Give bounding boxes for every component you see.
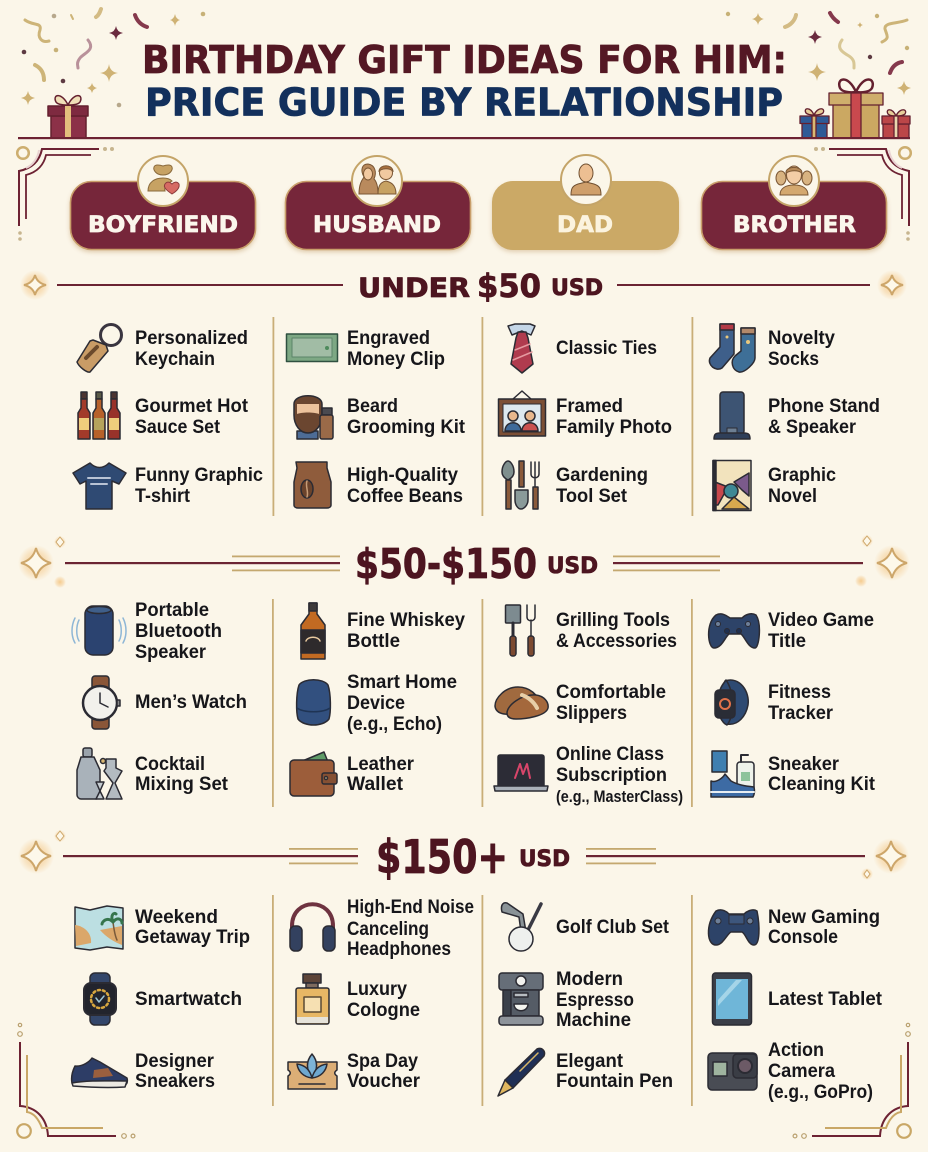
section heading: under $50: UNDER	[358, 273, 470, 304]
icon: hot sauce bottles	[78, 392, 120, 439]
item: comfortable slippers	[495, 681, 666, 724]
item: gourmet hot sauce set	[78, 392, 248, 439]
label: Leather	[347, 753, 414, 775]
label: (e.g., Echo)	[347, 713, 442, 735]
item: smart home device	[297, 671, 457, 735]
item: luxury cologne	[296, 974, 420, 1024]
label: Bottle	[347, 630, 400, 652]
icon: fountain pen	[498, 1048, 545, 1096]
label	[556, 395, 672, 438]
label	[135, 327, 248, 370]
label: Engraved	[347, 327, 430, 349]
icon: sneaker cleaning kit	[711, 751, 754, 797]
icon: bluetooth speaker	[72, 606, 126, 655]
item: phone stand and speaker	[714, 392, 880, 439]
label: Beard	[347, 395, 398, 417]
label: Machine	[556, 1009, 631, 1031]
label: Video Game	[768, 609, 874, 631]
section heading: $150+: $150+	[376, 830, 508, 884]
label: Cleaning Kit	[768, 773, 875, 795]
label: Sneaker	[768, 753, 839, 775]
item: classic ties	[508, 324, 657, 373]
label: Grilling Tools	[556, 609, 670, 631]
item: novelty socks	[709, 324, 835, 372]
item: weekend getaway trip	[75, 906, 250, 950]
icon: cologne bottle	[296, 974, 329, 1024]
title: PRICE GUIDE BY RELATIONSHIP	[145, 80, 783, 124]
item: golf club set	[501, 903, 669, 951]
item: action camera	[708, 1039, 873, 1103]
title	[142, 38, 787, 124]
label: Subscription	[556, 764, 667, 786]
icon: wallet	[290, 752, 337, 796]
item: high-end noise canceling headphones	[290, 896, 474, 960]
icon: brother	[776, 166, 812, 195]
corner ornament: top right	[814, 147, 911, 241]
item: spa day voucher	[288, 1050, 420, 1092]
label: Tool Set	[556, 485, 627, 507]
icon: headphones	[290, 904, 335, 951]
icon: golf clubs and ball	[501, 903, 541, 951]
label: Cocktail	[135, 753, 205, 775]
label	[768, 753, 875, 795]
tab: dad: DAD	[557, 212, 613, 238]
tab: boyfriend	[70, 156, 256, 252]
section heading: under $50: USD	[551, 276, 603, 301]
label	[556, 1050, 673, 1092]
icon: designer sneaker	[72, 1058, 127, 1087]
icon: tie	[508, 324, 535, 373]
label	[556, 609, 677, 652]
label	[768, 395, 880, 438]
label	[556, 743, 683, 806]
icon: whiskey bottle	[301, 603, 325, 659]
label	[768, 609, 874, 652]
label: Framed	[556, 395, 623, 417]
icon: gift box left	[48, 96, 88, 138]
label	[768, 681, 833, 724]
icon: gamepad	[708, 910, 759, 945]
section heading: $150+: USD	[519, 847, 570, 872]
item: designer sneakers	[72, 1050, 215, 1092]
label: Modern	[556, 968, 623, 990]
label	[135, 464, 263, 507]
tab: brother	[701, 156, 887, 252]
item: portable bluetooth speaker	[72, 599, 222, 663]
icon: gift boxes right	[800, 80, 910, 138]
label	[135, 395, 248, 438]
label: Fountain Pen	[556, 1070, 673, 1092]
icon: cocktail shaker	[77, 748, 122, 799]
icon: phone stand	[714, 392, 750, 439]
header rule	[18, 137, 910, 139]
label	[556, 464, 648, 507]
label: Espresso	[556, 989, 634, 1011]
label: Gourmet Hot	[135, 395, 248, 417]
label: Portable	[135, 599, 209, 621]
label: Coffee Beans	[347, 485, 463, 507]
label: Title	[768, 630, 806, 652]
label	[347, 464, 463, 507]
label	[347, 753, 414, 795]
label: Smartwatch	[135, 988, 242, 1010]
section heading: $50-$150: $50-$150	[355, 540, 537, 588]
tab: husband	[285, 156, 471, 252]
label: Mixing Set	[135, 773, 228, 795]
label: Tracker	[768, 702, 833, 724]
label	[347, 327, 445, 370]
label	[135, 906, 250, 948]
tab: brother: BROTHER	[733, 212, 856, 238]
label: Wallet	[347, 773, 403, 795]
label: Novel	[768, 485, 817, 507]
item: video game title	[709, 609, 874, 652]
icon: smart speaker	[297, 680, 330, 725]
icon: game controller	[709, 614, 759, 648]
label: Golf Club Set	[556, 916, 669, 938]
label: Funny Graphic	[135, 464, 263, 486]
item: high-quality coffee beans	[294, 462, 463, 508]
item: fine whiskey bottle	[301, 603, 465, 659]
item: gardening tool set	[502, 461, 648, 509]
icon: socks	[709, 324, 755, 372]
label: Gardening	[556, 464, 648, 486]
label: Headphones	[347, 938, 451, 960]
label	[135, 1050, 215, 1092]
label: Men’s Watch	[135, 691, 247, 713]
label: & Accessories	[556, 630, 677, 652]
icon: smartwatch	[84, 973, 116, 1025]
label	[768, 906, 880, 948]
label: Phone Stand	[768, 395, 880, 417]
item: online class subscription	[494, 743, 683, 806]
label: Socks	[768, 348, 819, 370]
label: Fine Whiskey	[347, 609, 465, 631]
item: framed family photo	[498, 391, 672, 438]
item: graphic novel	[713, 460, 836, 510]
label: Fitness	[768, 681, 831, 703]
item: engraved money clip	[286, 327, 445, 370]
icon: keychain	[77, 324, 122, 372]
label: Canceling	[347, 918, 429, 940]
label: Sneakers	[135, 1070, 215, 1092]
section heading: $150+	[18, 830, 909, 884]
icon: t-shirt	[73, 463, 126, 509]
item: men's watch	[83, 676, 247, 729]
icon: wristwatch	[83, 676, 120, 729]
item: funny graphic t-shirt	[73, 463, 263, 509]
label: Speaker	[135, 641, 206, 663]
label: Designer	[135, 1050, 214, 1072]
icon: lotus voucher	[288, 1054, 337, 1089]
label: Comfortable	[556, 681, 666, 703]
label	[768, 464, 836, 507]
label: T-shirt	[135, 485, 190, 507]
item: fitness tracker	[715, 680, 833, 725]
icon: dad	[571, 164, 601, 195]
icon: beard and bottle	[294, 396, 333, 439]
label	[347, 609, 465, 652]
item: cocktail mixing set	[77, 748, 228, 799]
label: Voucher	[347, 1070, 420, 1092]
label: Luxury	[347, 978, 407, 1000]
tab: boyfriend: BOYFRIEND	[88, 212, 238, 238]
item: modern espresso machine	[499, 968, 634, 1031]
label	[347, 978, 420, 1021]
item: new gaming console	[708, 906, 880, 948]
item: grilling tools	[506, 605, 677, 656]
label	[556, 968, 634, 1031]
title: BIRTHDAY GIFT IDEAS FOR HIM:	[142, 38, 787, 82]
label: Sauce Set	[135, 416, 220, 438]
label: Console	[768, 926, 838, 948]
label	[347, 896, 474, 960]
label	[347, 671, 457, 735]
label: Device	[347, 692, 405, 714]
label: Money Clip	[347, 348, 445, 370]
corner ornament: bottom right	[793, 1023, 911, 1138]
label	[768, 327, 835, 370]
confetti: top left	[21, 9, 205, 107]
section heading: under $50: $50	[477, 267, 541, 305]
label	[556, 681, 666, 724]
label: Latest Tablet	[768, 988, 882, 1010]
label: Graphic	[768, 464, 836, 486]
label: Novelty	[768, 327, 835, 349]
item: leather wallet	[290, 752, 414, 796]
label: Weekend	[135, 906, 218, 928]
label: Camera	[768, 1060, 835, 1082]
label: Action	[768, 1039, 824, 1061]
item: smartwatch	[84, 973, 242, 1025]
icon: picture frame	[498, 391, 546, 436]
item: sneaker cleaning kit	[711, 751, 875, 797]
label: (e.g., GoPro)	[768, 1081, 873, 1103]
corner ornament: bottom left	[17, 1023, 135, 1138]
section heading: $50-$150	[18, 535, 910, 588]
label: Elegant	[556, 1050, 623, 1072]
icon: slippers	[495, 687, 548, 719]
icon: espresso machine	[499, 973, 543, 1025]
label: Online Class	[556, 743, 664, 765]
item: personalized keychain	[77, 324, 248, 372]
icon: coffee bag	[294, 462, 331, 508]
label: Keychain	[135, 348, 215, 370]
icon: person with heart	[148, 165, 179, 194]
icon: spatula and fork	[506, 605, 535, 656]
icon: money clip	[286, 334, 338, 362]
corner ornament: top left	[17, 147, 114, 241]
section heading: $50-$150: USD	[547, 554, 598, 579]
label: Smart Home	[347, 671, 457, 693]
icon: garden tools	[502, 461, 539, 509]
label	[347, 395, 465, 438]
icon: laptop	[494, 755, 548, 791]
label: Slippers	[556, 702, 627, 724]
label: Spa Day	[347, 1050, 418, 1072]
tab: dad	[492, 155, 679, 252]
label: High-Quality	[347, 464, 458, 486]
label: Getaway Trip	[135, 926, 250, 948]
icon: couple	[359, 164, 396, 194]
icon: comic book	[713, 460, 751, 510]
icon: tablet	[712, 973, 752, 1025]
label: High-End Noise	[347, 896, 474, 918]
item: elegant fountain pen	[498, 1048, 673, 1096]
icon: travel map	[75, 906, 123, 950]
label	[768, 1039, 873, 1103]
label: Classic Ties	[556, 337, 657, 359]
label: & Speaker	[768, 416, 856, 438]
item: beard grooming kit	[294, 395, 465, 439]
label: Personalized	[135, 327, 248, 349]
label: (e.g., MasterClass)	[556, 788, 683, 806]
label: Family Photo	[556, 416, 672, 438]
icon: action camera	[708, 1053, 757, 1090]
label: Grooming Kit	[347, 416, 465, 438]
label	[347, 1050, 420, 1092]
label	[135, 599, 222, 663]
label: Cologne	[347, 999, 420, 1021]
confetti: top right	[726, 12, 911, 95]
label: New Gaming	[768, 906, 880, 928]
tab: husband: HUSBAND	[313, 212, 441, 238]
label: Bluetooth	[135, 620, 222, 642]
section heading: under $50	[20, 267, 907, 305]
label	[135, 753, 228, 795]
item: latest tablet	[712, 973, 882, 1025]
icon: fitness band	[715, 680, 748, 725]
